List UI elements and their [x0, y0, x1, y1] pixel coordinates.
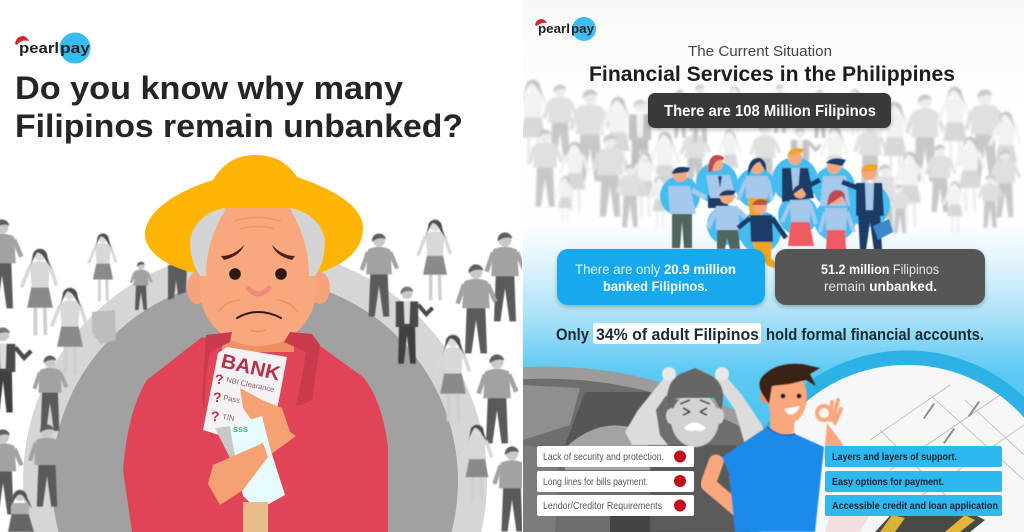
callout: 108 million: There are 108 Million Filipinos	[664, 103, 876, 120]
illustration: blue banked people	[660, 148, 893, 270]
shirt	[722, 427, 824, 532]
paper: bank requirements: ?	[215, 371, 224, 387]
stat card: banked: banked Filipinos.	[603, 278, 708, 294]
person: back right	[820, 159, 850, 206]
person: right man in suit	[842, 164, 893, 250]
item: support: Layers and layers of support.	[832, 451, 957, 463]
paper: bank requirements: BANK	[219, 350, 283, 385]
item: credit and loans: Accessible credit and loan application	[832, 500, 998, 512]
head	[767, 370, 807, 424]
stat card: banked: There are only 20.9 million	[575, 261, 736, 277]
crowd, right side	[362, 219, 530, 531]
person: man in suit, blonde	[782, 148, 820, 202]
item: requirements: Lendor/Creditor Requirements	[543, 500, 662, 512]
paper: bank requirements: Pass	[223, 393, 241, 405]
callout: 108 million	[648, 93, 891, 128]
logo: PearlPay: pay	[571, 22, 594, 36]
statement: 34 percent: Only	[556, 326, 590, 344]
item: payment options	[825, 471, 1002, 492]
hair	[759, 364, 820, 404]
documents: SSS: SSS	[233, 425, 248, 434]
mouth	[237, 312, 281, 318]
tablet	[729, 476, 746, 517]
item: credit and loans	[825, 495, 1002, 516]
list: problems	[537, 446, 694, 516]
logo: PearlPay: pay	[60, 40, 91, 57]
item: support	[825, 446, 1002, 467]
smile	[784, 406, 800, 414]
hand, lower	[208, 443, 268, 505]
bent arm	[708, 462, 748, 518]
paper: bank requirements	[203, 347, 287, 440]
eyes	[229, 268, 287, 280]
title: Do you know why many	[15, 70, 403, 106]
forehead wrinkles	[234, 218, 281, 229]
title: Filipinos remain unbanked?	[15, 108, 463, 144]
logo: PearlPay: pearl	[538, 22, 570, 36]
list: benefits	[825, 446, 1002, 516]
person: front left man	[708, 190, 748, 249]
statement: 34 percent	[556, 323, 984, 344]
heading: Financial Services in the Philippines	[589, 63, 955, 86]
item: lack of security: Lack of security and protection.	[543, 451, 664, 463]
stat card: unbanked: remain unbanked.	[824, 278, 937, 294]
illustration: worried old man	[123, 155, 388, 532]
statement: 34 percent: 34% of adult Filipinos	[596, 326, 759, 344]
crowd, left side	[0, 219, 187, 532]
paper: bank requirements: NBI Clearance	[226, 375, 275, 394]
person: front woman, red hair	[820, 190, 854, 250]
person: back left man	[668, 167, 706, 248]
panel: financial services in the Philippines	[523, 17, 1024, 532]
item: long lines: Long lines for bills payment.	[543, 476, 648, 488]
illustration: stressed man in gray	[625, 367, 770, 532]
paper: bank requirements: ?	[211, 408, 220, 424]
person: front woman in red skirt	[782, 185, 816, 246]
ears	[187, 272, 330, 304]
hair	[190, 208, 325, 276]
person: woman in yellow	[738, 158, 772, 215]
stat card: unbanked	[775, 249, 985, 305]
face	[200, 208, 316, 346]
logo: PearlPay: pearl	[19, 40, 59, 57]
crowd, gray background	[515, 79, 1020, 233]
item: payment options: Easy options for payment.	[832, 476, 944, 488]
neck	[770, 405, 795, 434]
blue circles	[660, 157, 890, 253]
eyebrows	[221, 245, 295, 260]
nose	[248, 288, 269, 294]
person: woman with red hair	[706, 155, 736, 208]
item: requirements	[537, 495, 694, 516]
statement: 34 percent: hold formal financial accounts.	[766, 326, 984, 344]
hat	[145, 155, 363, 274]
hand, upper	[240, 388, 296, 455]
item: long lines	[537, 471, 694, 492]
title	[15, 70, 463, 144]
paper: bank requirements: TIN	[222, 412, 235, 423]
subtitle: The Current Situation	[688, 43, 832, 60]
illustration: happy man in blue	[708, 364, 846, 532]
paper: bank requirements: ?	[213, 389, 222, 405]
jacket	[123, 337, 388, 532]
logo: PearlPay	[535, 17, 596, 41]
collar	[202, 332, 320, 440]
stat card: banked	[557, 249, 765, 305]
documents: SSS	[215, 416, 285, 532]
cheek lines	[218, 300, 298, 332]
stat card: unbanked: 51.2 million Filipinos	[821, 261, 939, 277]
raised arm with OK hand	[817, 400, 846, 458]
eyes	[781, 394, 801, 398]
neck	[222, 340, 294, 352]
person: front man in navy with yellow trousers	[738, 199, 786, 270]
item: lack of security	[537, 446, 694, 467]
logo: PearlPay	[15, 32, 91, 64]
background circles	[23, 249, 487, 532]
backdrop: coins circle	[207, 367, 885, 532]
backdrop: documents circle	[737, 350, 1024, 532]
panel: why Filipinos remain unbanked	[0, 0, 530, 532]
